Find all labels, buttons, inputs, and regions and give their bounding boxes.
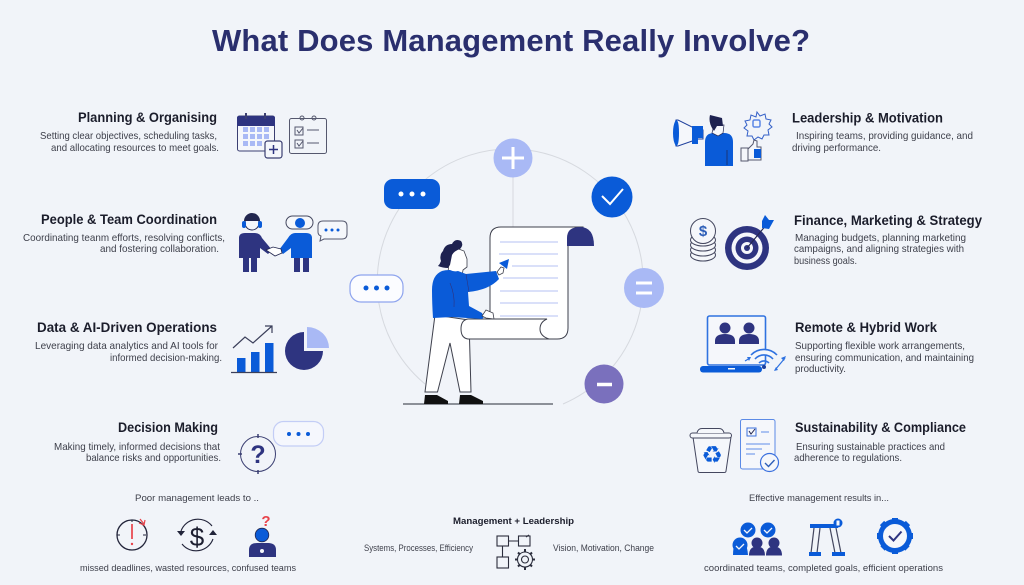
text block: sustainability description: Ensuring sustainable practices and	[796, 441, 945, 453]
text block: planning description: Setting clear objectives, scheduling tasks,	[40, 130, 217, 142]
icon: wasted money: $	[190, 522, 205, 552]
text block: people description: Coordinating teanm efforts, resolving conflicts,	[23, 232, 225, 244]
text block: planning description	[40, 130, 219, 154]
icon: speech pill	[274, 422, 324, 446]
text block: remote description: Supporting flexible work arrangements,	[795, 340, 965, 352]
text block: vision: Vision, Motivation, Change	[553, 543, 654, 554]
heading: leadership: Leadership & Motivation	[792, 110, 943, 126]
heading: sustainability: Sustainability & Compliance	[795, 420, 966, 435]
panel: planning and organising	[40, 110, 326, 158]
icon: laptop with wifi	[700, 316, 786, 372]
diagram: central illustration	[350, 138, 664, 404]
icon: minus circle	[584, 364, 624, 404]
text block: remote description: productivity.	[795, 363, 846, 375]
text block: poor management heading: Poor management leads to ..	[135, 493, 259, 504]
title: What Does Management Really Involve?	[212, 23, 810, 58]
panel: remote and hybrid work	[700, 316, 974, 375]
panel: sustainability and compliance	[690, 420, 966, 472]
ring	[377, 149, 643, 404]
text block: planning description: and allocating resources to meet goals.	[51, 142, 219, 154]
heading: data: Data & AI-Driven Operations	[37, 320, 217, 335]
heading: finance: Finance, Marketing & Strategy	[794, 213, 982, 228]
icon: equals circle	[624, 268, 664, 308]
icon: confused person: ?	[261, 513, 271, 530]
icon: recycle bin: ♻	[701, 441, 723, 469]
icon: white speech pill	[350, 275, 403, 302]
icon: wasted money	[177, 519, 217, 552]
panel: management plus leadership	[364, 516, 654, 570]
text block: leadership description: Inspiring teams, providing guidance, and	[796, 130, 973, 142]
icon: leader person	[705, 115, 733, 166]
icon: thumbs up	[741, 140, 761, 161]
figure: person legs	[424, 315, 483, 404]
text block: sustainability description	[794, 441, 945, 464]
text block: data description: informed decision-making.	[110, 352, 222, 364]
icon: calendar	[237, 113, 282, 158]
text block: data description: Leveraging data analytics and AI tools for	[35, 340, 218, 352]
icon: clock	[117, 519, 147, 550]
icon: coins: $	[699, 223, 708, 240]
heading: planning: Planning & Organising	[78, 110, 217, 125]
text block: systems: Systems, Processes, Efficiency	[364, 543, 473, 554]
panel: poor management	[80, 493, 296, 574]
text block: leadership description	[792, 130, 973, 154]
text block: decision description: Making timely, informed decisions that	[54, 441, 220, 453]
icon: compliance document	[740, 420, 778, 472]
heading: remote: Remote & Hybrid Work	[795, 320, 937, 335]
text block: leadership description: driving performance.	[792, 142, 881, 154]
text block: remote description	[795, 340, 974, 375]
icon: question circle	[238, 434, 276, 474]
text block: decision description: balance risks and opportunities.	[86, 452, 221, 464]
ground line	[403, 403, 553, 405]
icon: target	[725, 215, 774, 270]
bar chart icon	[231, 326, 277, 372]
icon: flow and gear	[497, 535, 535, 570]
text block: decision description	[54, 441, 221, 464]
panel: finance, marketing and strategy	[690, 213, 982, 270]
icon: checklist clipboard	[290, 116, 326, 154]
heading: people: People & Team Coordination	[41, 212, 217, 227]
icon: coordinated team	[732, 522, 782, 556]
icon: coins	[690, 218, 716, 261]
text block: effective management heading: Effective management results in...	[749, 493, 889, 504]
icon: star gear	[744, 112, 772, 140]
text block: finance description: campaigns, and aligning strategies with	[794, 243, 964, 255]
text block: people description: and fostering collaboration.	[100, 243, 219, 255]
panel: leadership and motivation	[673, 110, 973, 166]
figure: person upper body	[432, 240, 509, 319]
icon: question circle: ?	[250, 441, 266, 469]
heading: management plus leadership: Management + Leadership	[453, 516, 574, 527]
panel: effective management	[704, 493, 943, 574]
heading: decision: Decision Making	[118, 420, 218, 435]
panel: decision making	[54, 420, 324, 474]
icon: handshake	[239, 213, 347, 272]
text block: finance description: Managing budgets, planning marketing	[795, 232, 966, 244]
icon: check circle	[592, 176, 632, 218]
icon: recycle bin	[690, 428, 732, 472]
icon: efficiency gear	[877, 518, 913, 554]
text block: people description	[23, 232, 225, 255]
scroll	[461, 227, 594, 339]
icon: completed goals	[809, 518, 845, 556]
icon: blue speech pill	[384, 179, 440, 209]
icon: confused person	[249, 513, 276, 557]
text block: effective management outcomes: coordinated teams, completed goals, efficient operations	[704, 563, 943, 574]
text block: data description	[35, 340, 222, 364]
icon: megaphone	[673, 120, 703, 146]
text block: sustainability description: adherence to regulations.	[794, 452, 902, 464]
text block: finance description: business goals.	[794, 255, 857, 267]
text block: remote description: ensuring communication, and maintaining	[795, 352, 974, 364]
panel: people and team coordination	[23, 212, 347, 272]
panel: data and AI	[35, 320, 329, 372]
icon: plus circle	[494, 138, 532, 178]
text block: poor management outcomes: missed deadlines, wasted resources, confused teams	[80, 563, 296, 574]
pie chart icon	[285, 327, 329, 370]
text block: finance description	[794, 232, 966, 267]
